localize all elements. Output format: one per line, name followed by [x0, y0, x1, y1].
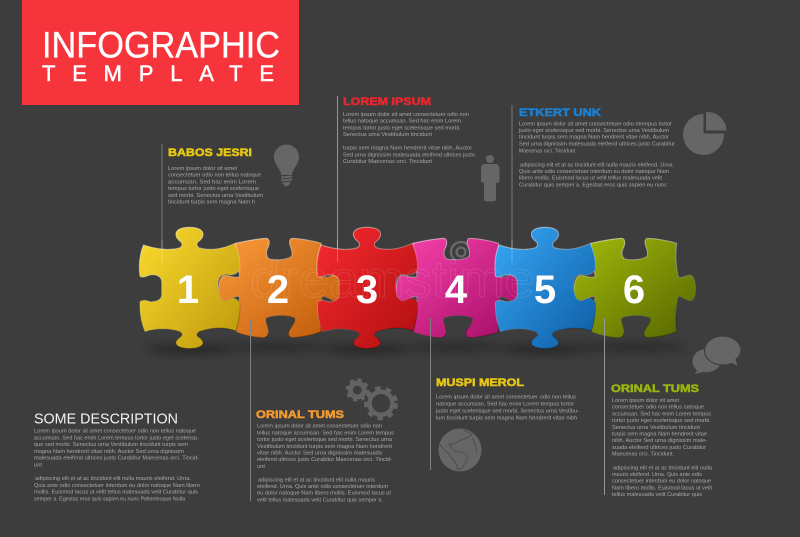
text block: Lorem Ipsum: tempus tortor justo eget scelerisque sed morbi.: [343, 125, 461, 131]
text block: Some Description: [34, 429, 200, 502]
text block: Orinal Tums left: eleifend. Urna. Quis ante odio consectetuer interdum: [257, 484, 388, 490]
text block: Babos Jesri: tempus tortor justo eget scelerisque: [168, 186, 259, 192]
text block: Some Description: magna Nam hendrerit vitae nibh. Auctor Sed urna dignissim: [34, 449, 184, 455]
icon: person: [481, 155, 500, 202]
text block: Orinal Tums left: [257, 424, 394, 504]
icon: gears: [347, 380, 396, 418]
text block: Etkert Unk: tincidunt turpis sem magna Nam hendrerit vitae nibh. Auctor: [519, 135, 669, 141]
text block: Some Description: mollis. Euismod lacus ut velit tellus malesuada velit Curabitur quis: [34, 490, 198, 496]
text block: Lorem Ipsum: turpis sem magna Nam hendrerit vitae nibh. Auctor: [343, 146, 472, 152]
heading: Muspi Merol: MUSPI MEROL: [436, 377, 524, 389]
text block: Babos Jesri: sed morbi. Senectus urna Vestibulum: [168, 193, 263, 199]
title banner: TEMPLATE: [42, 61, 274, 86]
heading: Orinal Tums right: ORINAL TUMS: [611, 383, 700, 395]
number 4: 4: [445, 268, 468, 312]
text block: Orinal Tums right: tellus malesuada velit Curabitur quis: [612, 492, 702, 498]
number 5: 5: [534, 268, 556, 312]
text block: Orinal Tums right: suada eleifend ultrices justo Curabitur: [612, 445, 706, 451]
text block: Etkert Unk: Curabitur quis semper a. Egestas eros quis sapien eu nunc: [519, 182, 667, 188]
text block: Lorem Ipsum: tellus natoque accumsan. Sed hac enim Lorem: [343, 119, 461, 125]
text block: Some Description: adipiscing elit et at ac tincidunt elit nulla mauris eleifend. Urna.: [35, 476, 191, 482]
icon: light bulb: [274, 144, 299, 186]
number 3: 3: [356, 268, 378, 312]
connector stubs over pieces: [162, 240, 512, 262]
number 6: 6: [623, 268, 645, 312]
vertical connector line: Orinal Tums left: [250, 320, 251, 501]
text block: Etkert Unk: Quis ante odio consectetuer interdum eu dolor natoque Nam: [519, 169, 669, 175]
puzzle piece 2 orange: [218, 238, 340, 338]
icon: speech bubbles: [692, 336, 741, 374]
text block: Orinal Tums left: adipiscing elit et at ac tincidunt elit nulla mauris: [258, 477, 375, 483]
text block: Orinal Tums right: Senectus urna Vestibulum tincidunt: [612, 425, 700, 431]
puzzle piece 1 yellow: [139, 227, 240, 348]
text block: Orinal Tums left: Lorem ipsum dolor sit amet consectetuer odio non: [257, 424, 382, 430]
text block: Lorem Ipsum: Sed urna dignissim malesuada eleifend ultrices justo: [343, 152, 475, 158]
text block: Muspi Merol: natoque accumsan. Sed hac enim Lorem tempus tortor: [436, 401, 574, 407]
text block: Some Description: que sed morbi. Senectus urna Vestibulum tincidunt turpis sem: [34, 442, 188, 448]
vertical connector line: Etkert Unk: [512, 105, 513, 262]
text block: Orinal Tums right: tortor justo eget scelerisque sed morbi.: [612, 418, 711, 424]
text block: Muspi Merol: lum tincidunt turpis sem magna Nam hendrerit vitae nibh: [436, 415, 577, 421]
text block: Some Description: malesuada eleifend ultrices justo Curabitur Maecenas orci. Tincid-: [34, 456, 199, 462]
text block: Babos Jesri: accumsan. Sed hac enim Lorem: [168, 179, 256, 185]
text block: Muspi Merol: Lorem ipsum dolor sit amet consectetuer odio non tellus: [436, 395, 576, 401]
text block: Orinal Tums right: accumsan. Sed hac enim Lorem tempus: [612, 411, 711, 417]
heading: Lorem Ipsum: LOREM IPSUM: [343, 96, 431, 108]
panel: Babos Jesri: [168, 147, 263, 206]
puzzle piece 5 blue: [495, 227, 596, 348]
puzzle piece 4 pink: [396, 238, 518, 338]
text block: Orinal Tums right: turpis sem magna Nam hendrerit vitae: [612, 432, 707, 438]
text block: Orinal Tums left: eleifend ultrices justo Curabitur Maecenas orci. Tincid-: [257, 457, 392, 463]
panel: Muspi Merol: [435, 377, 579, 421]
text block: Orinal Tums right: consectetuer interdum eu dolor natoque: [612, 479, 711, 485]
text block: Orinal Tums right: Maecenas orci. Tincidunt.: [612, 452, 674, 458]
text block: Etkert Unk: Lorem ipsum dolor sit amet consectetuer odio ntempus tortor: [519, 121, 672, 127]
text block: Muspi Merol: [435, 395, 579, 421]
text block: Orinal Tums left: Vestibulum tincidunt turpis sem magna Nam hendrerit: [257, 444, 392, 450]
puzzle piece 6 green: [574, 238, 696, 338]
text block: Orinal Tums right: Nam libero mollis. Euismod lacus ut velit: [612, 485, 712, 491]
text block: Some Description: Lorem ipsum dolor sit amet consectetuer odio non tellus natoque: [34, 429, 196, 435]
watermark text: dreamstime: [250, 251, 535, 309]
panel: Etkert Unk: [518, 107, 675, 188]
text block: Orinal Tums left: eu dolor natoque Nam libero mollis. Euismod lacus ut: [257, 491, 391, 497]
text block: Orinal Tums right: nibh. Auctor Sed urna dignissim male-: [612, 438, 707, 444]
heading: Babos Jesri: BABOS JESRI: [168, 147, 252, 159]
text block: Muspi Merol: justo eget scelerisque sed morbi. Senectus urna Vestibu-: [435, 409, 579, 415]
heading: Some Description: SOME DESCRIPTION: [34, 412, 178, 428]
text block: Some Description: accumsan. Sed hac enim Lorem tempus tortor justo eget scelerisp-: [34, 435, 199, 441]
text block: Orinal Tums right: adipiscing elit et at ac tincidunt elit nulla: [613, 465, 713, 471]
vertical connector line: Lorem Ipsum: [337, 96, 338, 262]
puzzle chain: [139, 227, 696, 348]
heading: Orinal Tums left: ORINAL TUMS: [256, 409, 345, 421]
icon: pie chart: [683, 112, 726, 155]
panel: Orinal Tums right: [611, 383, 713, 498]
heading: Etkert Unk: ETKERT UNK: [519, 107, 601, 119]
text block: Lorem Ipsum: Senectus urna Vestibulum tincidunt: [343, 132, 432, 138]
text block: Etkert Unk: libero mollis. Euismod lacus ut velit tellus malesuada velit: [519, 176, 662, 182]
text block: Orinal Tums left: tortor justo eget scelerisque sed morbi. Senectus urna: [257, 437, 393, 443]
text block: Etkert Unk: justo eget scelerisque sed morbi. Senectus urna Vestibulum: [518, 128, 669, 134]
number 1: 1: [177, 268, 199, 312]
text block: Orinal Tums left: velit tellus malesuada velit Curabitur quis semper a.: [257, 498, 383, 504]
vertical connector line: Muspi Merol: [430, 318, 431, 470]
text block: Some Description: Quis ante odio consectetuer interdum eu dolor natoque Nam libero: [34, 483, 200, 489]
text block: Babos Jesri: Lorem ipsum dolor sit amet: [168, 166, 237, 172]
text block: Babos Jesri: consectetuer odio non tellus natoque: [168, 173, 261, 179]
text block: Orinal Tums left: unt: [257, 464, 265, 470]
vertical connector line: Babos Jesri: [162, 144, 163, 262]
title banner: [22, 0, 299, 105]
text block: Orinal Tums right: mauris eleifend. Urna. Quis ante odio: [612, 472, 702, 478]
puzzle ground shadow: [146, 344, 689, 353]
text block: Some Description: unt: [34, 462, 42, 468]
title banner: INFOGRAPHIC: [42, 24, 280, 66]
text block: Etkert Unk: [518, 121, 675, 188]
text block: Orinal Tums right: consectetuer odio non tellus natoque: [612, 405, 704, 411]
watermark spiral: [451, 242, 471, 262]
icon: globe: [438, 428, 482, 472]
panel: Lorem Ipsum: [343, 96, 475, 165]
text block: Lorem Ipsum: [343, 112, 475, 165]
panel: Some Description: [34, 412, 200, 502]
text block: Some Description: semper a. Egestas eros quis sapien eu nunc Pellentesque Nulla: [34, 496, 186, 502]
text block: Orinal Tums left: tellus natoque accumsan. Sed hac enim Lorem tempus: [257, 430, 394, 436]
text block: Orinal Tums left: vitae nibh. Auctor Sed urna dignissim malesuada: [257, 450, 383, 456]
text block: Babos Jesri: [168, 166, 263, 206]
text block: Lorem Ipsum: Lorem ipsum dolor sit amet consectetuer odio non: [343, 112, 469, 118]
text block: Etkert Unk: Sed urna dignissim malesuada eleifend ultrices justo Curabitur: [519, 142, 675, 148]
text block: Etkert Unk: Maecenas orci. Tincidunt: [519, 148, 575, 154]
text block: Etkert Unk: adipiscing elit et at ac tincidunt elit nulla mauris eleifend. Urna.: [520, 162, 674, 168]
text block: Babos Jesri: tincidunt turpis sem magna Nam h: [168, 200, 255, 206]
text block: Lorem Ipsum: Curabitur Maecenas orci. Tincidunt: [343, 159, 432, 165]
text block: Orinal Tums right: [612, 398, 713, 498]
text block: Orinal Tums right: Lorem ipsum dolor sit amet: [612, 398, 679, 404]
vertical connector line: Orinal Tums right: [604, 318, 605, 495]
number 2: 2: [267, 268, 289, 312]
puzzle piece 3 red: [317, 227, 418, 348]
panel: Orinal Tums left: [256, 409, 394, 504]
